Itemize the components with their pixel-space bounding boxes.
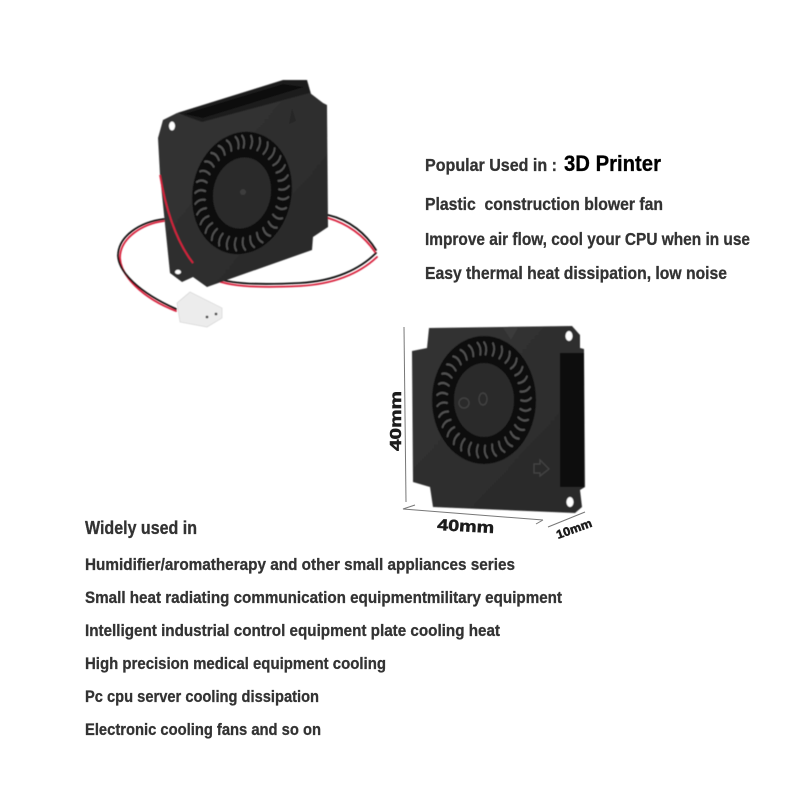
fan top sleeve [177, 80, 311, 123]
mounting holes [169, 122, 175, 130]
dimension label: depth: 10mm [554, 516, 594, 542]
white connector [177, 292, 222, 327]
dimension label: height: 40mm [388, 391, 405, 451]
feature line 2: Improve air flow, cool your CPU when in use [425, 229, 750, 249]
fan body [158, 93, 328, 287]
application 2: Small heat radiating communication equipmentmilitary equipment [85, 588, 562, 607]
application 5: Pc cpu server cooling dissipation [85, 687, 319, 706]
arrow mark [289, 108, 296, 124]
product photo: front view fan with dimensions [388, 326, 594, 542]
heading: widely used in: Widely used in [85, 517, 197, 538]
sleeve opening [184, 84, 304, 118]
fan wheel [192, 127, 292, 259]
side slot [560, 353, 584, 487]
hub marks [459, 393, 487, 408]
application 4: High precision medical equipment cooling [85, 654, 386, 673]
feature line 1: Plastic construction blower fan [425, 194, 663, 214]
wires: left loop to connector [118, 215, 377, 311]
feature line 3: Easy thermal heat dissipation, low noise [425, 263, 727, 283]
heading: 3D printer: 3D Printer [564, 151, 661, 176]
heading: popular use: Popular Used in : [425, 155, 557, 175]
application 1: Humidifier/aromatherapy and other small appliances series [85, 555, 515, 574]
dimension label: width: 40mm [437, 517, 495, 537]
short red wire [160, 175, 193, 263]
dimension line: height [404, 327, 406, 502]
hub mark [240, 189, 246, 195]
application 3: Intelligent industrial control equipment plate cooling heat [85, 621, 500, 640]
product photo: angled blower fan with wires and connector [118, 80, 377, 327]
arrow mark: top [503, 328, 518, 340]
dimension line: width [403, 505, 543, 524]
mounting holes [566, 331, 572, 341]
fan photo [412, 326, 585, 513]
arrow mark: side [534, 460, 549, 476]
dimension line: depth [548, 512, 585, 527]
fan wheel [432, 336, 536, 464]
text block: applications [85, 517, 562, 739]
fan body [412, 326, 585, 513]
text block: features [425, 151, 750, 283]
application 6: Electronic cooling fans and so on [85, 720, 321, 739]
